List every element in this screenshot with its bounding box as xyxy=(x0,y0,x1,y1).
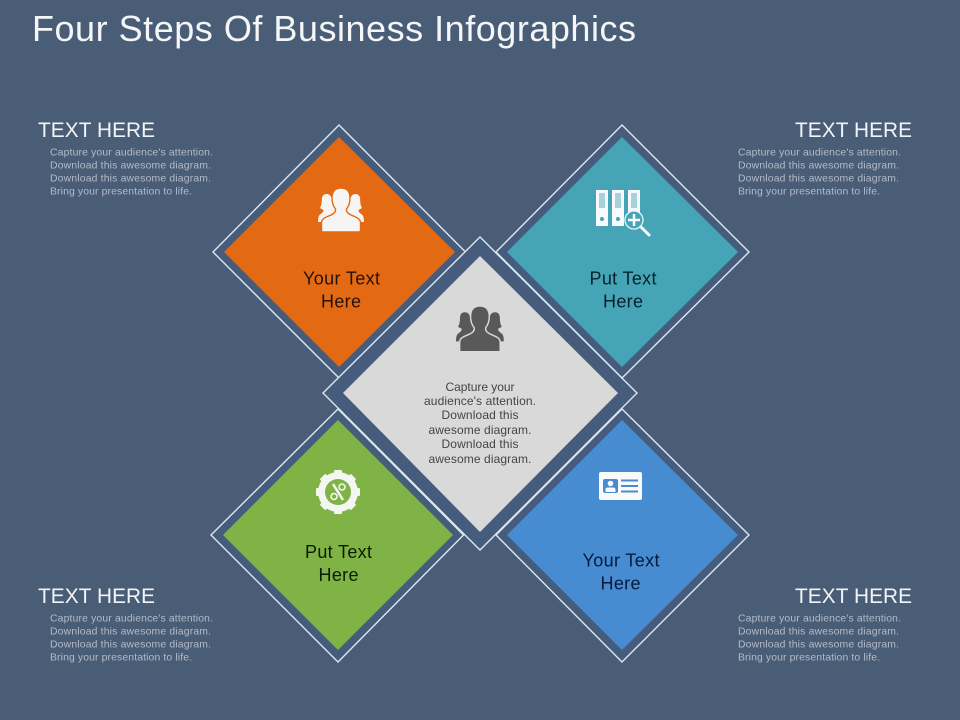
description: bottom right xyxy=(738,614,901,664)
description: bottom left: Bring your presentation to life. xyxy=(50,652,192,664)
description: bottom left xyxy=(50,614,213,664)
description: top right: Download this awesome diagram. xyxy=(738,174,899,184)
label: put text here (green) xyxy=(305,542,372,585)
description: top right: Download this awesome diagram. xyxy=(738,160,899,172)
description: center: awesome diagram. xyxy=(428,423,532,437)
label: your text here (blue) xyxy=(582,550,660,594)
description: top left: Download this awesome diagram. xyxy=(50,174,211,184)
icon: people xyxy=(318,188,364,232)
description: center xyxy=(424,380,536,466)
heading: bottom left: TEXT HERE xyxy=(38,585,155,608)
label: put text here (green): Here xyxy=(318,565,358,585)
description: center: audience's attention. xyxy=(424,394,536,408)
icon: people (dark) xyxy=(456,306,504,352)
text block: bottom right xyxy=(738,585,912,664)
heading: top left: TEXT HERE xyxy=(38,119,155,142)
description: top left: Capture your audience's attention. xyxy=(50,148,213,158)
icon: id card xyxy=(599,472,642,500)
label: put text here (teal): Here xyxy=(603,292,643,312)
description: top right: Capture your audience's attention. xyxy=(738,148,901,158)
panel: green diamond xyxy=(211,409,464,662)
text block: top right xyxy=(738,119,912,198)
title: Four Steps Of Business Infographics xyxy=(32,8,636,49)
description: center: Download this xyxy=(442,408,518,422)
description: top left: Bring your presentation to life. xyxy=(50,186,192,198)
panel: center diamond xyxy=(323,237,637,550)
heading: top right: TEXT HERE xyxy=(795,119,912,142)
description: bottom right: Capture your audience's attention. xyxy=(738,614,901,624)
description: top right xyxy=(738,148,901,198)
description: bottom right: Download this awesome diagram. xyxy=(738,640,899,650)
label: your text here (orange) xyxy=(303,268,380,312)
heading: bottom right: TEXT HERE xyxy=(795,585,912,608)
label: your text here (orange): Your Text xyxy=(303,268,380,288)
text block: bottom left xyxy=(38,585,213,664)
description: center: Download this xyxy=(442,437,518,451)
label: put text here (teal): Put Text xyxy=(590,268,656,288)
description: bottom left: Download this awesome diagram. xyxy=(50,626,211,638)
description: center: Capture your xyxy=(446,380,514,394)
label: your text here (blue): Here xyxy=(600,574,640,594)
description: top right: Bring your presentation to life. xyxy=(738,186,880,198)
description: bottom right: Download this awesome diagram. xyxy=(738,626,899,638)
label: put text here (teal) xyxy=(590,268,656,312)
description: bottom left: Download this awesome diagram. xyxy=(50,640,211,650)
description: top left: Download this awesome diagram. xyxy=(50,160,211,172)
panel: orange diamond xyxy=(213,125,466,378)
text block: top left xyxy=(38,119,213,198)
panel: teal diamond xyxy=(496,125,749,378)
label: put text here (green): Put Text xyxy=(305,542,372,562)
panel: blue diamond xyxy=(496,409,749,662)
description: top left xyxy=(50,148,213,198)
icon: gear with percent xyxy=(316,470,360,514)
icon: binders with magnifier xyxy=(596,190,649,235)
description: center: awesome diagram. xyxy=(428,452,532,466)
label: your text here (blue): Your Text xyxy=(582,550,660,570)
label: your text here (orange): Here xyxy=(321,292,361,312)
description: bottom left: Capture your audience's attention. xyxy=(50,614,213,624)
description: bottom right: Bring your presentation to life. xyxy=(738,652,880,664)
